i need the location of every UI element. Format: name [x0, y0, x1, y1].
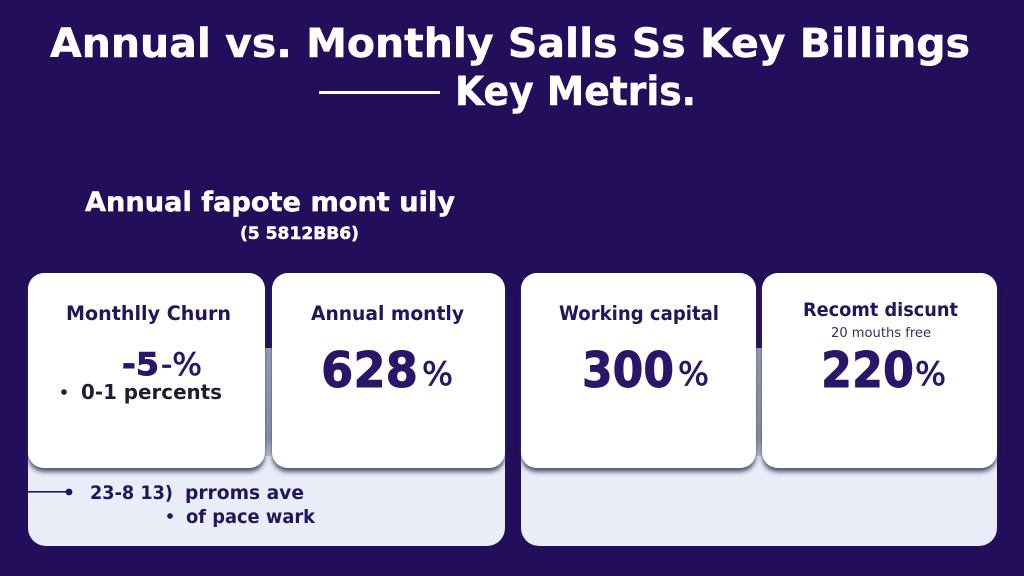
- gap: left card shadow: [264, 348, 273, 456]
- card: annual montly: %: [422, 355, 453, 393]
- subtitle: [85, 187, 455, 244]
- callout: promo notes: of pace wark: [186, 506, 315, 528]
- card: recomt discunt: Recomt discunt: [803, 299, 958, 321]
- subtitle: Annual fapote mont uily: [85, 187, 455, 218]
- card: recomt discunt: %: [915, 355, 946, 393]
- card: monthly churn: -5: [122, 347, 159, 383]
- title: [50, 21, 970, 115]
- card: annual montly: [272, 273, 505, 468]
- card: working capital: [521, 273, 756, 468]
- card: recomt discunt: [762, 273, 997, 468]
- card: annual montly: Annual montly: [311, 302, 464, 325]
- card: recomt discunt: 20 mouths free: [831, 325, 931, 341]
- gap: right card shadow: [755, 348, 763, 456]
- card: working capital: 300: [582, 342, 674, 399]
- card: annual montly: 628: [321, 342, 418, 399]
- card: monthly churn: [28, 273, 265, 468]
- callout: promo notes: [28, 482, 315, 528]
- panel: right background: [521, 348, 997, 546]
- card: monthly churn: -%: [161, 347, 202, 383]
- title: Annual vs. Monthly Salls Ss Key Billings: [50, 21, 970, 67]
- card: monthly churn: 0-1 percents: [81, 380, 222, 404]
- card: recomt discunt: 220: [821, 342, 914, 399]
- callout: promo notes: prroms ave: [185, 482, 304, 504]
- callout: promo notes: 23-8 13): [90, 482, 173, 504]
- card: monthly churn: Monthlly Churn: [66, 302, 231, 325]
- title: Key Metris.: [455, 69, 696, 115]
- subtitle: (5 5812BB6): [240, 224, 359, 244]
- card: working capital: %: [678, 355, 709, 393]
- panel: left background: [28, 348, 505, 546]
- card: working capital: Working capital: [559, 302, 719, 325]
